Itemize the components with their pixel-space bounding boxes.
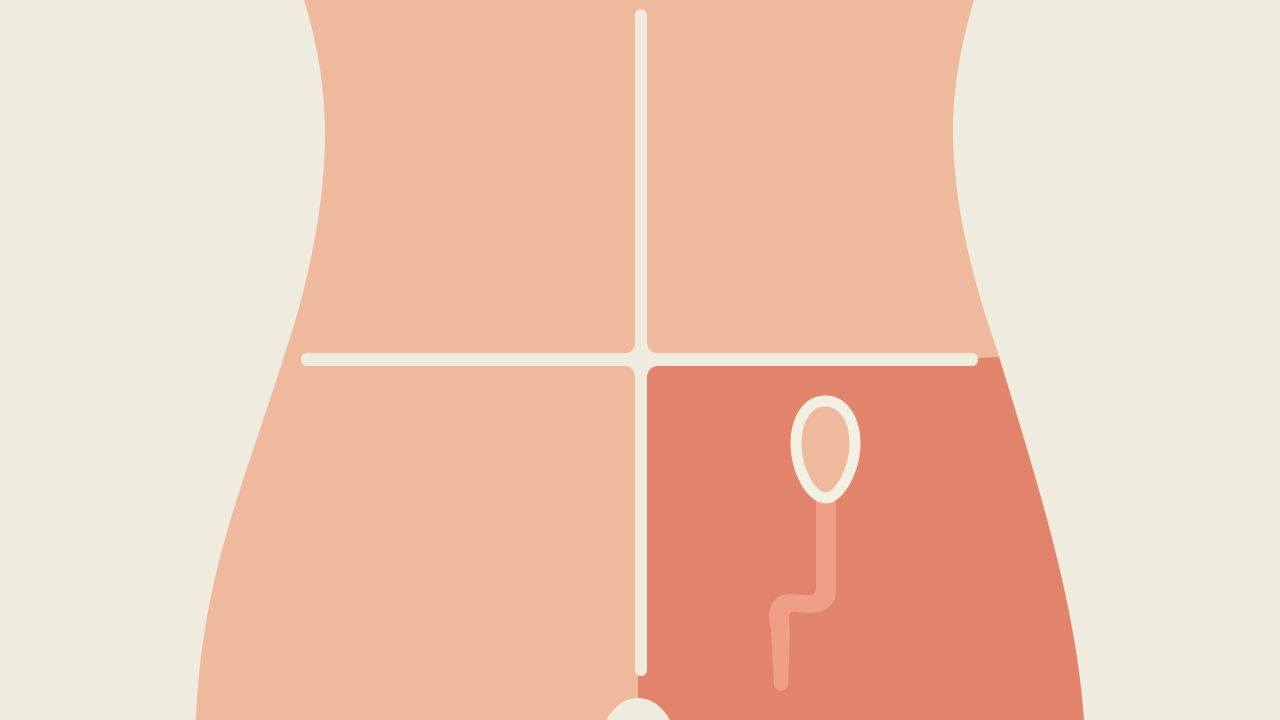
pelvic mound <box>606 698 670 720</box>
appendix tail <box>769 498 836 690</box>
icon: appendix <box>769 401 855 690</box>
vertical divider <box>635 9 647 676</box>
horizontal divider <box>301 353 978 366</box>
torso silhouette <box>196 0 1084 720</box>
divider junction <box>625 342 658 378</box>
highlighted quadrant <box>638 357 1084 720</box>
appendix head <box>796 401 855 498</box>
quadrant divider lines <box>301 9 978 676</box>
